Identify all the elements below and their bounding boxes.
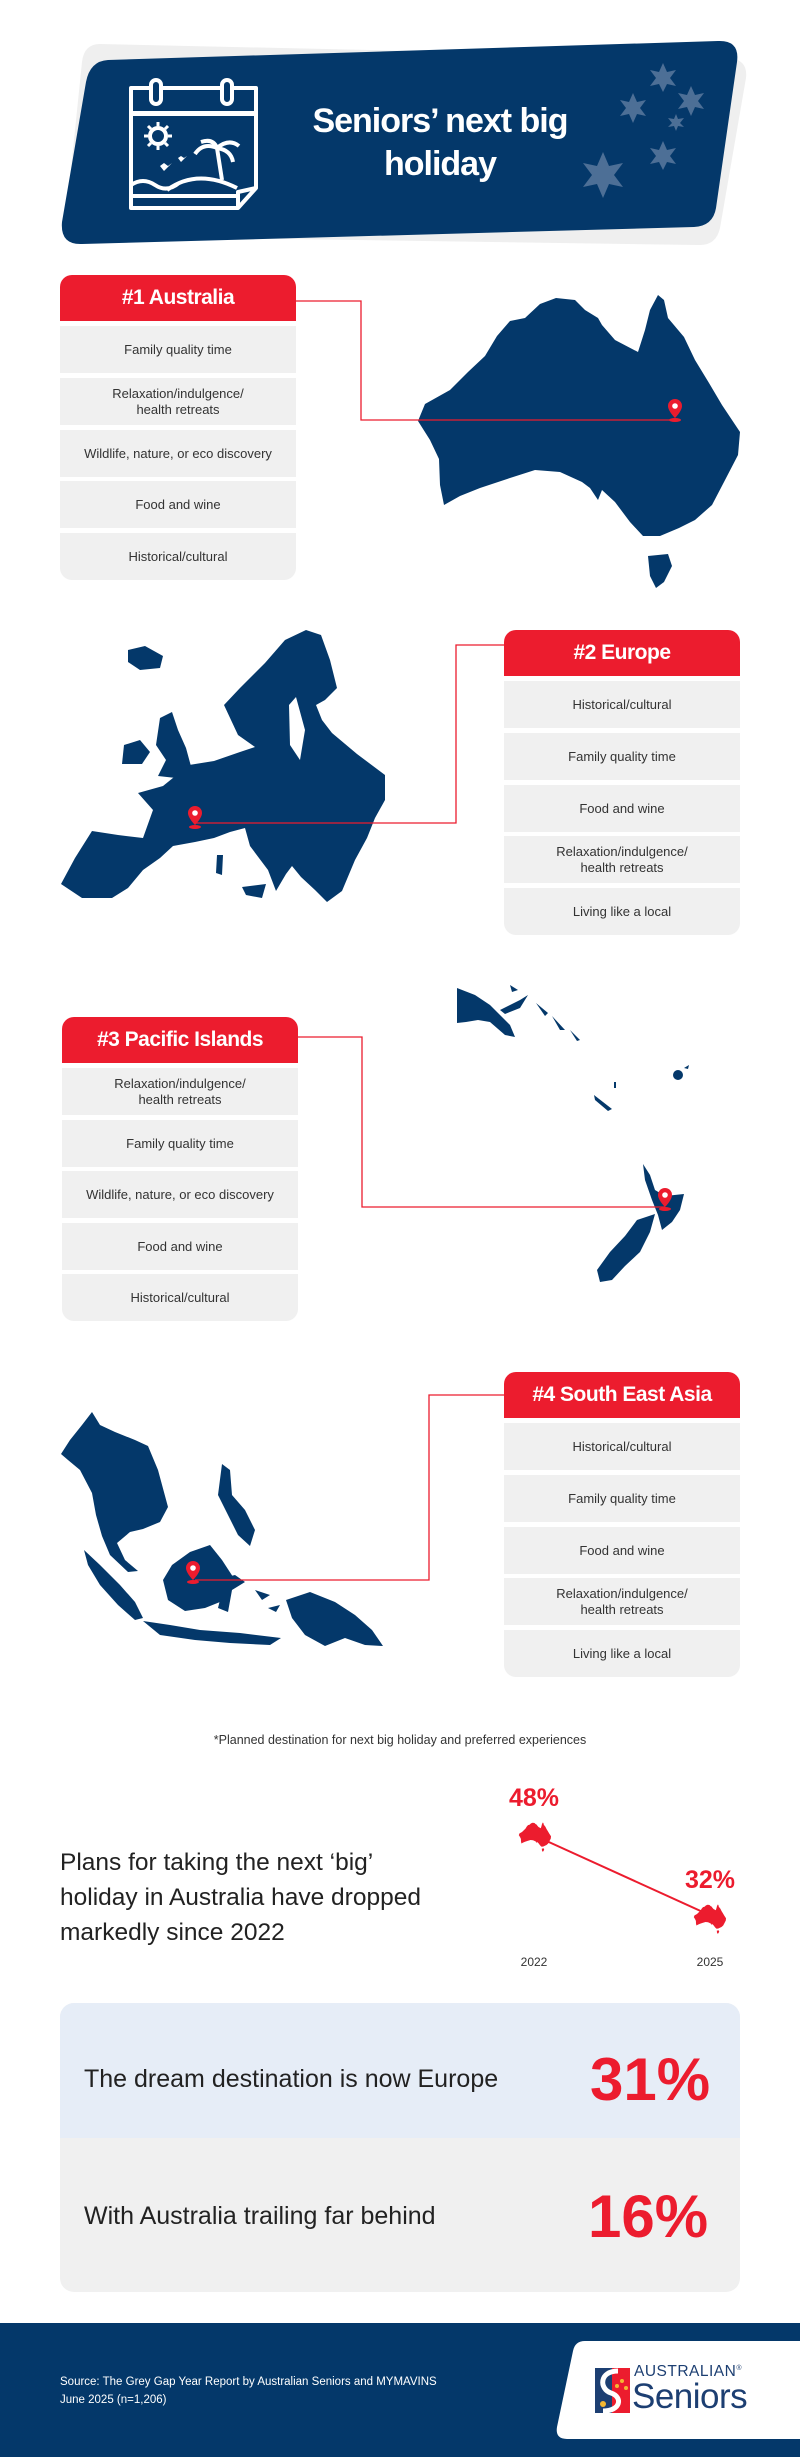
panel: #2 Europe xyxy=(504,630,740,935)
chart: Australia trend 2022 to 2025: 32% xyxy=(685,1866,735,1894)
heading xyxy=(504,630,740,676)
panel: #3 Pacific Islands: Historical/cultural xyxy=(130,1290,229,1304)
panel: #3 Pacific Islands xyxy=(62,1017,298,1321)
stat: Australia 16%: With Australia trailing far behind xyxy=(84,2202,436,2230)
chart: Australia trend 2022 to 2025 xyxy=(509,1784,735,1969)
panel: #1 Australia: Relaxation/indulgence/ xyxy=(112,386,244,400)
stars xyxy=(583,63,704,198)
text block: plans dropped: Plans for taking the next ‘big’ xyxy=(60,1849,373,1876)
panel: #2 Europe: Living like a local xyxy=(573,904,671,918)
panel: #1 Australia xyxy=(60,275,296,580)
source text: Source: The Grey Gap Year Report by Australian Seniors and MYMAVINS xyxy=(60,2376,437,2388)
heading: #4 South East Asia xyxy=(532,1383,712,1406)
map: Australia with connector xyxy=(296,295,740,588)
logo: Australian Seniors: Seniors xyxy=(632,2377,747,2416)
panel: #2 Europe: health retreats xyxy=(580,860,664,874)
map: Europe with connector xyxy=(61,630,504,902)
stat: Australia 16%: 16% xyxy=(588,2183,708,2250)
text block: plans dropped xyxy=(60,1849,421,1946)
header banner xyxy=(62,41,746,245)
panel: #4 South East Asia: Historical/cultural xyxy=(572,1438,671,1454)
stat: Europe 31%: The dream destination is now Europe xyxy=(84,2065,498,2093)
logo: Australian Seniors: AUSTRALIAN® xyxy=(634,2363,742,2380)
footer xyxy=(0,2323,800,2457)
text block: plans dropped: holiday in Australia have dropped xyxy=(60,1884,421,1911)
footnote: *Planned destination for next big holiday and preferred experiences xyxy=(214,1733,586,1747)
panel: #3 Pacific Islands: Wildlife, nature, or eco discovery xyxy=(86,1186,274,1202)
stats box xyxy=(60,2003,740,2292)
heading: #2 Europe xyxy=(573,641,671,664)
stat: Australia 16% xyxy=(84,2183,708,2250)
heading xyxy=(60,275,296,321)
panel: #4 South East Asia: Living like a local xyxy=(573,1646,671,1660)
title xyxy=(312,102,568,183)
panel: #3 Pacific Islands: Relaxation/indulgence/ xyxy=(114,1076,246,1090)
panel: #1 Australia: Historical/cultural xyxy=(128,548,227,564)
stat: Europe 31%: 31% xyxy=(590,2046,710,2113)
title: holiday xyxy=(384,145,496,183)
source text: June 2025 (n=1,206) xyxy=(60,2394,166,2406)
heading: #1 Australia xyxy=(122,286,234,309)
panel: #4 South East Asia: Food and wine xyxy=(579,1542,665,1558)
icon: calendar with beach xyxy=(131,80,256,208)
map: Pacific Islands with connector xyxy=(298,985,689,1282)
stat: Europe 31% xyxy=(60,2003,740,2138)
panel: #2 Europe: Historical/cultural xyxy=(572,696,671,712)
panel: #2 Europe: Relaxation/indulgence/ xyxy=(556,844,688,858)
panel: #4 South East Asia: Relaxation/indulgence/ xyxy=(556,1586,688,1600)
source text xyxy=(60,2376,437,2406)
panel: #4 South East Asia xyxy=(504,1372,740,1677)
panel: #3 Pacific Islands: Food and wine xyxy=(137,1238,223,1254)
title: Seniors’ next big xyxy=(312,102,568,140)
panel: #1 Australia: health retreats xyxy=(136,402,220,416)
logo: Australian Seniors xyxy=(556,2341,800,2439)
chart: Australia trend 2022 to 2025: 48% xyxy=(509,1784,559,1812)
panel: #1 Australia: Family quality time xyxy=(124,342,232,356)
panel: #2 Europe: Family quality time xyxy=(568,748,676,764)
panel: #4 South East Asia: health retreats xyxy=(580,1602,664,1616)
chart: Australia trend 2022 to 2025: 2025 xyxy=(697,1955,724,1969)
panel: #2 Europe: Food and wine xyxy=(579,800,665,816)
heading xyxy=(62,1017,298,1063)
panel: #1 Australia: Wildlife, nature, or eco discovery xyxy=(84,446,272,460)
heading xyxy=(504,1372,740,1418)
heading: #3 Pacific Islands xyxy=(97,1028,263,1051)
panel: #3 Pacific Islands: health retreats xyxy=(138,1092,222,1106)
chart: Australia trend 2022 to 2025: 2022 xyxy=(521,1955,548,1969)
panel: #4 South East Asia: Family quality time xyxy=(568,1490,676,1506)
text block: plans dropped: markedly since 2022 xyxy=(60,1919,285,1946)
map: South East Asia with connector xyxy=(61,1394,504,1646)
panel: #3 Pacific Islands: Family quality time xyxy=(126,1136,234,1150)
panel: #1 Australia: Food and wine xyxy=(135,496,221,512)
